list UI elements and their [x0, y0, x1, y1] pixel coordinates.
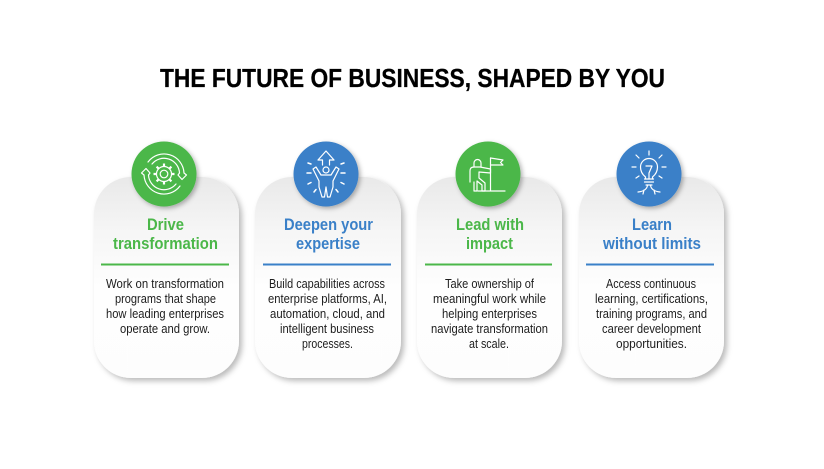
body text: programs that shape [115, 292, 216, 306]
body text: at scale. [469, 337, 509, 351]
body text: enterprise platforms, AI, [268, 292, 387, 306]
heading [456, 215, 524, 253]
heading: expertise [296, 234, 360, 253]
card background [255, 177, 401, 378]
heading: impact [466, 234, 513, 253]
card background [579, 177, 724, 378]
icon: gear with cycle arrows [132, 142, 196, 206]
body text: career development [602, 322, 701, 336]
card background [94, 177, 239, 378]
body text [106, 277, 224, 336]
icon: person with flag [456, 142, 520, 206]
panel: learn without limits [579, 142, 724, 378]
body text: automation, cloud, and [270, 307, 385, 321]
divider [586, 264, 714, 266]
body text: Access continuous [606, 277, 696, 291]
divider [425, 264, 552, 266]
body text: how leading enterprises [106, 307, 224, 321]
body text: processes. [302, 337, 353, 351]
heading: transformation [113, 234, 218, 253]
body text: operate and grow. [120, 322, 210, 336]
body text: learning, certifications, [595, 292, 708, 306]
panel: drive transformation [94, 142, 239, 378]
heading: Drive [147, 215, 184, 234]
body text: Work on transformation [106, 277, 224, 291]
heading: Learn [632, 215, 672, 234]
body text [595, 277, 708, 351]
body text: opportunities. [616, 337, 687, 351]
heading [113, 215, 218, 253]
heading: Deepen your [284, 215, 373, 234]
body text: navigate transformation [431, 322, 548, 336]
heading: without limits [602, 234, 701, 253]
heading: Lead with [456, 215, 524, 234]
body text: meaningful work while [433, 292, 546, 306]
body text: helping enterprises [442, 307, 537, 321]
panel: lead with impact [417, 142, 562, 378]
body text: Build capabilities across [269, 277, 385, 291]
icon: person with up arrow [294, 142, 358, 206]
divider [263, 264, 391, 266]
body text: training programs, and [596, 307, 707, 321]
heading [602, 215, 701, 253]
card background [417, 177, 562, 378]
icon: light bulb with roots [616, 142, 682, 206]
divider [101, 264, 229, 266]
body text [268, 277, 387, 351]
body text: intelligent business [280, 322, 374, 336]
title: THE FUTURE OF BUSINESS, SHAPED BY YOU [160, 65, 665, 93]
heading [284, 215, 373, 253]
panel: deepen your expertise [255, 142, 401, 378]
body text [431, 277, 548, 351]
body text: Take ownership of [445, 277, 534, 291]
